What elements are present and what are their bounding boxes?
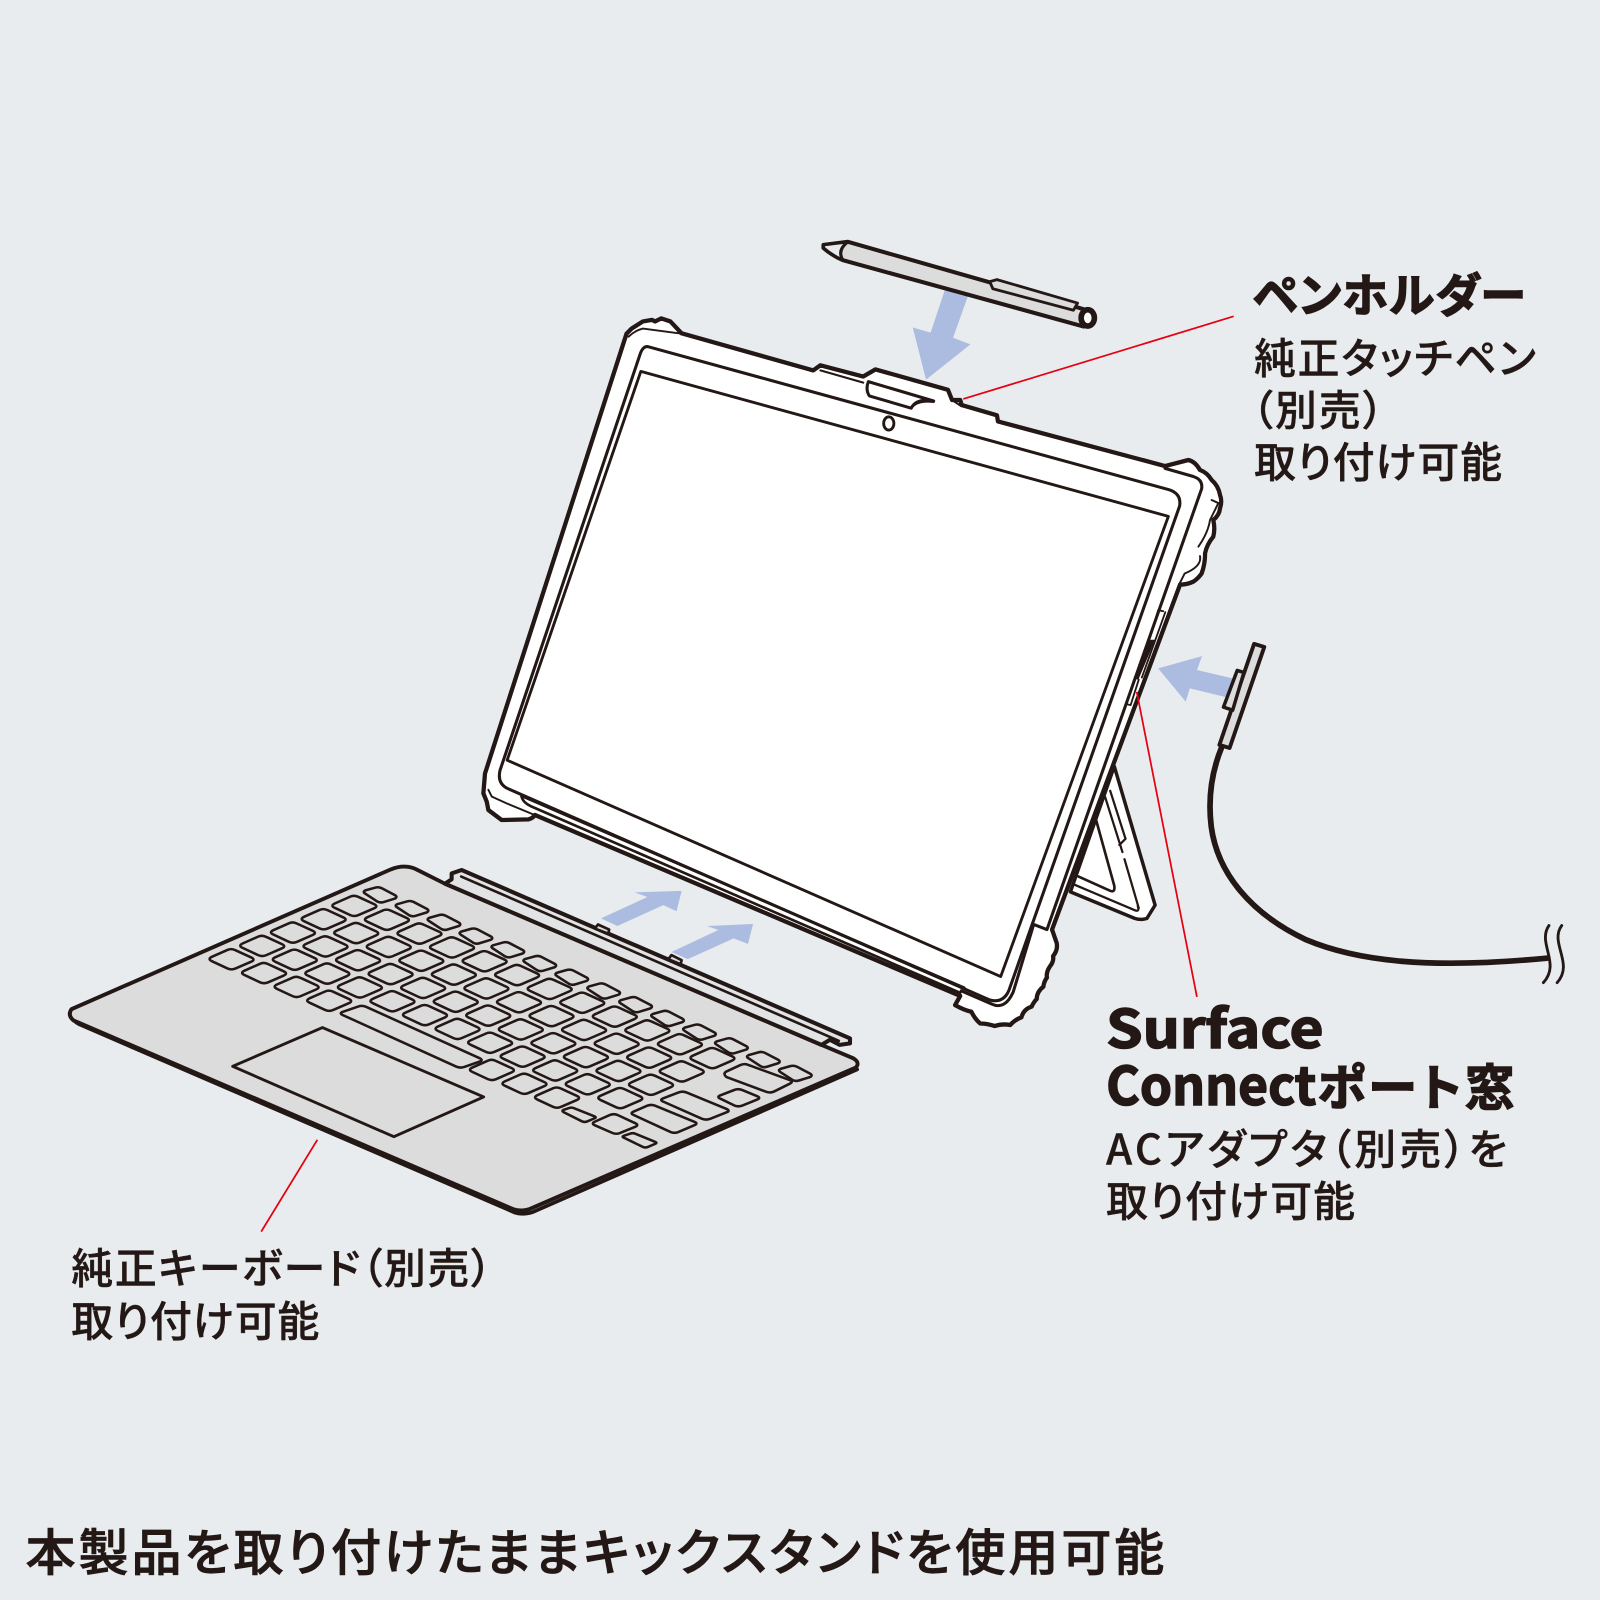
pen end cap [1081, 310, 1094, 326]
heading: ポート窓 [1317, 1049, 1514, 1120]
camera [884, 417, 894, 430]
connector [1219, 644, 1264, 748]
tablet with bumper case [483, 318, 1221, 1026]
arrow: pen to holder [913, 290, 970, 380]
leader line: Surface Connect [1137, 692, 1197, 997]
callout: keyboard: 取り付け可能 [71, 1289, 319, 1350]
description: ACアダプタ（別売）を [1106, 1116, 1507, 1177]
callout: keyboard: 純正キーボード（別売） [71, 1236, 492, 1297]
callout: pen holder [1252, 260, 1536, 491]
description: 純正タッチペン [1254, 325, 1536, 386]
right rail line [961, 468, 1202, 1006]
screen [507, 371, 1168, 977]
heading [1106, 987, 1514, 1121]
stylus pen [823, 242, 1094, 327]
description: （別売） [1252, 378, 1384, 439]
cable break mark [1543, 926, 1563, 983]
pen holder slot [867, 382, 934, 408]
heading: Connect [1106, 1044, 1316, 1121]
leader line: keyboard [261, 1140, 317, 1232]
frame inner line [499, 347, 1180, 1001]
description: 取り付け可能 [1254, 430, 1502, 491]
touchpad [233, 1028, 484, 1137]
arrow: charger to port [1158, 656, 1234, 702]
main key rows [210, 896, 734, 1108]
callout: keyboard [71, 1236, 492, 1350]
callout: Surface Connect port [1106, 987, 1514, 1229]
wide and arrow keys [562, 1064, 792, 1147]
hinge tabs [595, 924, 609, 934]
heading: Surface [1106, 987, 1323, 1064]
keyboard base [70, 867, 858, 1210]
description: 取り付け可能 [1106, 1168, 1355, 1229]
arrow: keyboard to tablet 2 [671, 924, 753, 959]
keyboard lower thickness [70, 1016, 857, 1214]
hinge strip [445, 870, 850, 1045]
description [1252, 325, 1536, 491]
function key row [364, 887, 812, 1081]
arrow: keyboard to tablet 1 [601, 891, 682, 926]
bottom strip lines [521, 796, 964, 993]
AC adapter cable and connector [1210, 644, 1563, 983]
heading: ペンホルダー [1253, 260, 1526, 326]
keyboard cover [70, 867, 858, 1214]
bottom caption: 本製品を取り付けたままキックスタンドを使用可能 [26, 1513, 1164, 1585]
kickstand [1070, 766, 1155, 919]
tablet outer outline [483, 318, 1221, 1026]
description [1106, 1116, 1507, 1229]
spacebar [341, 1006, 482, 1068]
bumper seams [488, 329, 1218, 815]
connect port window [1127, 610, 1165, 705]
leader line: pen holder [963, 316, 1234, 399]
